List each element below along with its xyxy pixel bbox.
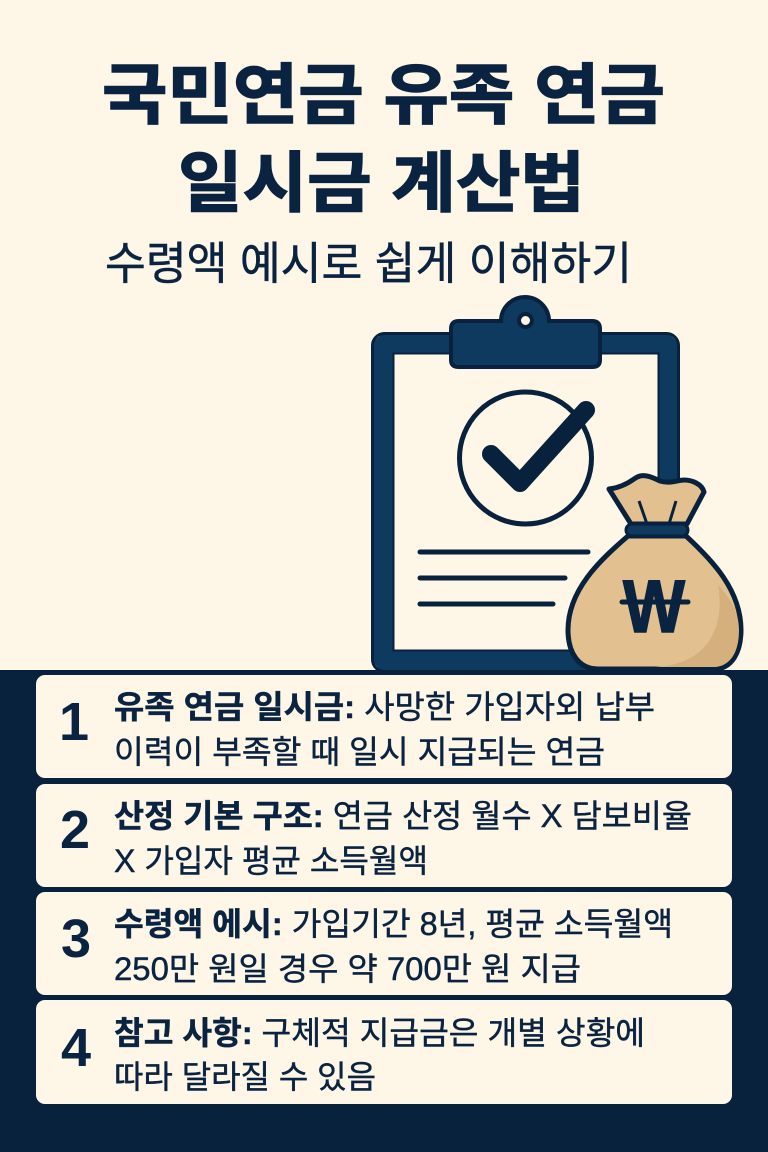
icon: clipboard xyxy=(372,297,678,672)
item 4 text xyxy=(114,1015,645,1095)
bag tie xyxy=(626,524,688,536)
panel: item 3 xyxy=(36,892,732,995)
item 1 text xyxy=(114,689,655,770)
item 3 text: 250만 원일 경우 약 700만 원 지급 xyxy=(114,951,581,987)
item 2 text: X 가입자 평균 소득월액 xyxy=(114,843,428,879)
won symbol: W xyxy=(623,565,685,648)
item 3 text: 수령액 에시: 가입기간 8년, 평균 소득월액 xyxy=(114,906,673,942)
icon: money bag xyxy=(568,476,741,669)
bag body xyxy=(568,536,741,669)
document lines xyxy=(420,552,588,604)
item 1 text: 이력이 부족할 때 일시 지급되는 연금 xyxy=(114,734,605,770)
item 4 text: 따라 달라질 수 있음 xyxy=(114,1059,376,1095)
item 1 text: 유족 연금 일시금: 사망한 가입자외 납부 xyxy=(114,689,655,725)
panel: item 4 xyxy=(36,1000,732,1104)
bag neck xyxy=(609,476,704,524)
title: 일시금 계산법 xyxy=(178,146,585,220)
clipboard clip xyxy=(451,297,600,367)
number 4: 4 xyxy=(61,1018,91,1078)
panel: item 2 xyxy=(36,784,732,887)
item 3 text xyxy=(114,906,673,987)
clipboard board xyxy=(382,344,668,662)
number 2: 2 xyxy=(60,800,90,860)
check circle xyxy=(460,392,592,524)
number 1: 1 xyxy=(59,692,89,752)
item 2 text xyxy=(114,798,692,879)
subtitle: 수령액 예시로 쉽게 이해하기 xyxy=(105,238,632,289)
item 2 text: 산정 기본 구조: 연금 산정 월수 X 담보비율 xyxy=(114,798,692,834)
item 4 text: 참고 사항: 구체적 지급금은 개별 상황에 xyxy=(114,1015,645,1051)
check mark xyxy=(491,410,586,483)
title: 국민연금 유족 연금 xyxy=(102,58,665,132)
title xyxy=(102,58,665,220)
panel: item 1 xyxy=(36,675,732,778)
number 3: 3 xyxy=(61,909,91,969)
dark lower background xyxy=(0,670,768,1152)
